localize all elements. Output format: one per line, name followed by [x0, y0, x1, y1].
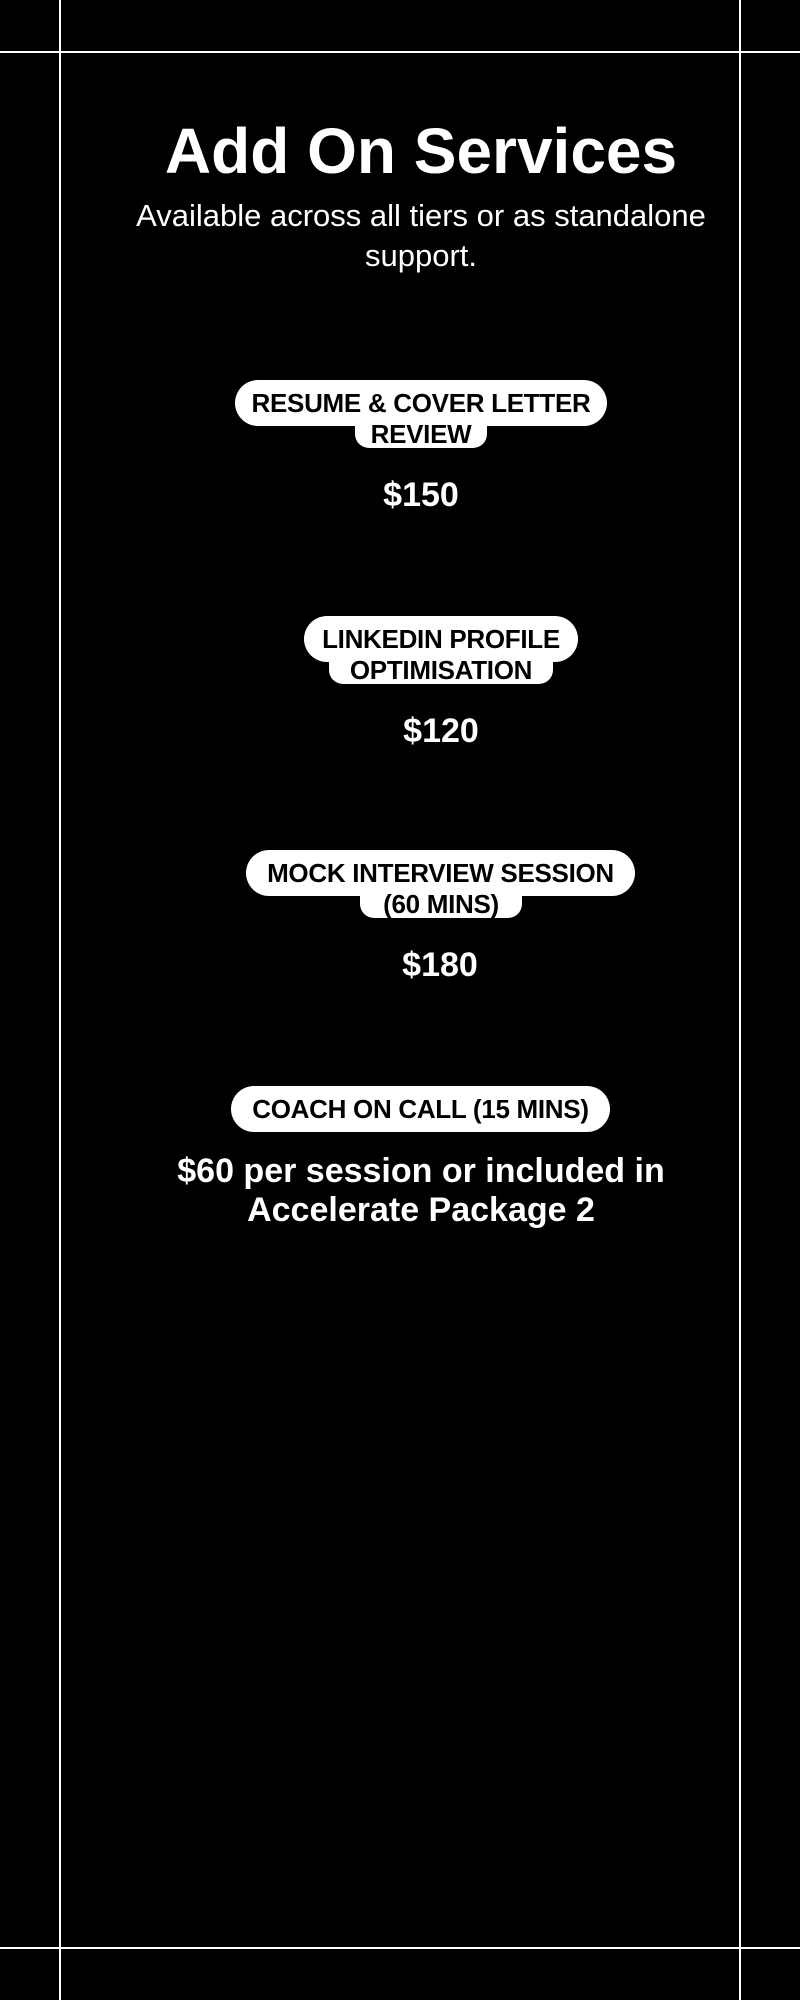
pill label	[231, 1086, 610, 1132]
coach price text: $60 per session or included in Accelerate Package 2	[177, 1152, 665, 1229]
pill label: MOCK INTERVIEW SESSION	[267, 858, 614, 888]
service: mock interview: (60 MINS)	[383, 889, 499, 919]
pill label	[235, 380, 607, 426]
service: linkedin	[304, 616, 578, 750]
service: linkedin: OPTIMISATION	[350, 655, 532, 685]
pill label	[246, 850, 635, 896]
price: $150	[383, 476, 459, 514]
title: Add On Services	[165, 115, 677, 187]
price: $180	[402, 946, 478, 984]
service: resume	[235, 380, 607, 514]
pill label	[304, 616, 578, 662]
subtitle: Available across all tiers or as standalone support.	[136, 198, 706, 273]
service: mock interview	[246, 850, 635, 984]
pill label: LINKEDIN PROFILE	[322, 624, 560, 654]
pill label: RESUME & COVER LETTER	[252, 388, 590, 418]
service: resume: REVIEW	[371, 419, 471, 449]
pill label: COACH ON CALL (15 MINS)	[252, 1094, 589, 1124]
price: $120	[403, 712, 479, 750]
